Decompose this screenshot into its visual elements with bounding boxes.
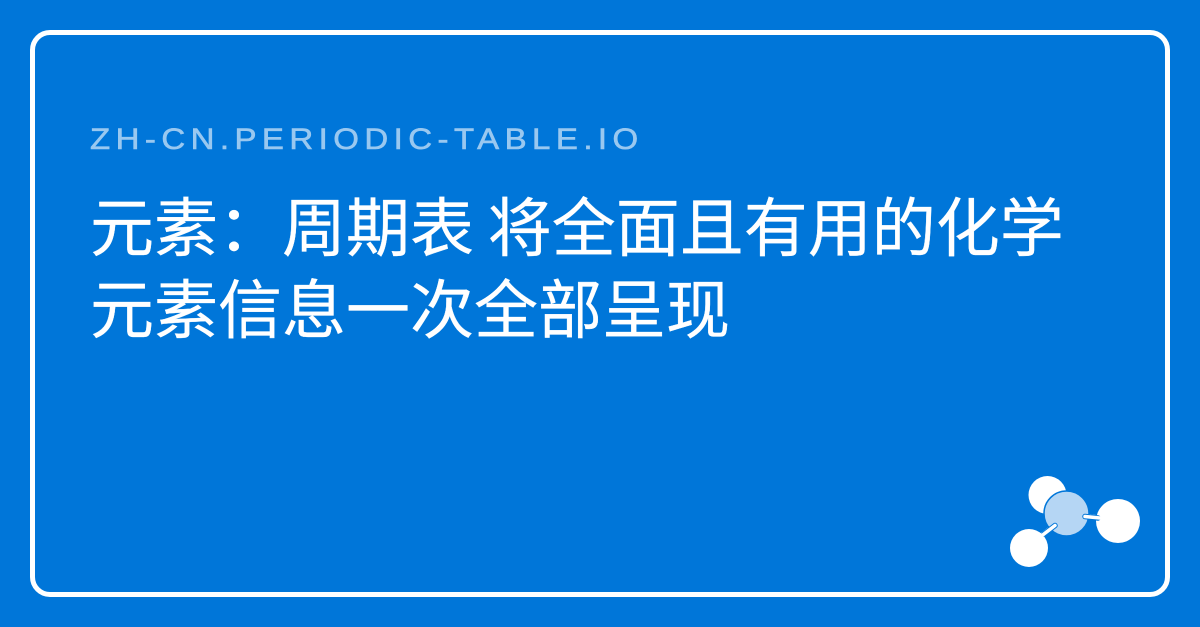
title [90, 193, 1064, 347]
title: 元素：周期表 将全面且有用的化学 [90, 193, 1064, 265]
icon: molecule [1010, 476, 1140, 567]
site address: ZH-CN.PERIODIC-TABLE.IO [90, 123, 644, 156]
title: 元素信息一次全部呈现 [90, 275, 730, 347]
